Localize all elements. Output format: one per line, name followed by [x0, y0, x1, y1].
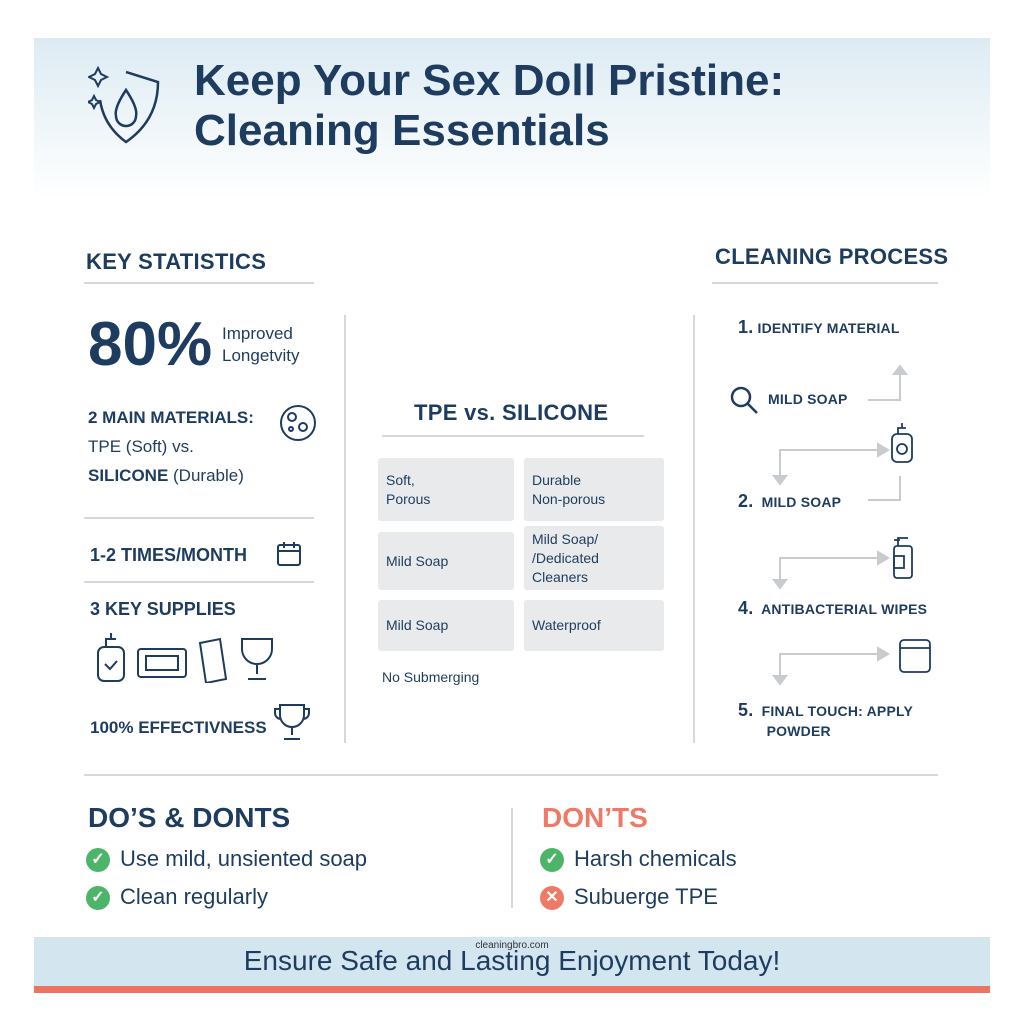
stat: materials: TPE (Soft) vs. [88, 437, 194, 456]
panel: cleaning process: 4. ANTIBACTERIAL WIPES [738, 598, 927, 618]
title: Keep Your Sex Doll Pristine: [194, 56, 784, 105]
stat: supplies: 3 KEY SUPPLIES [90, 599, 236, 619]
panel: donts: Harsh chemicals [574, 846, 737, 871]
stat: frequency: 1-2 TIMES/MONTH [90, 545, 247, 565]
panel: cleaning process: 5. FINAL TOUCH: APPLY [738, 700, 913, 720]
panel: donts [540, 802, 737, 910]
panel: key statistics: Longetvity [222, 346, 300, 365]
title [194, 56, 784, 155]
panel: donts: DON’TS [542, 802, 648, 833]
panel: cleaning process: POWDER [767, 723, 831, 739]
cells: Soft, [386, 472, 415, 488]
panel: TPE vs silicone: Mild Soap/ [532, 530, 598, 546]
panel: dos: Use mild, unsiented soap [120, 846, 367, 871]
panel: TPE vs silicone: Non-porous [532, 490, 605, 506]
panel: TPE vs silicone: Mild Soap [386, 617, 448, 633]
footer banner: cleaningbro.com [475, 940, 549, 951]
cells [378, 458, 514, 521]
stat: effectiveness: 100% EFFECTIVNESS [90, 718, 267, 737]
panel: donts: Subuerge TPE [574, 884, 718, 909]
footer banner: Ensure Safe and Lasting Enjoyment Today! [244, 945, 780, 976]
panel: dos: ✓ [91, 889, 105, 906]
panel: dos: ✓ [91, 851, 105, 868]
panel: key statistics: Improved [222, 324, 293, 343]
panel: TPE vs silicone: Mild Soap [386, 552, 448, 568]
panel: donts: ✕ [545, 889, 559, 906]
stat: materials: 2 MAIN MATERIALS: [88, 408, 254, 427]
panel: cleaning process: 2. MILD SOAP [738, 491, 841, 511]
panel: TPE vs silicone: /Dedicated [532, 550, 599, 566]
stat: materials: SILICONE (Durable) [88, 466, 244, 485]
panel: cleaning process: CLEANING PROCESS [715, 244, 948, 269]
cells: Porous [386, 490, 430, 506]
panel: dos: DO’S & DONTS [88, 802, 290, 833]
panel: key statistics: KEY STATISTICS [86, 249, 266, 274]
panel: cleaning process: 1. IDENTIFY MATERIAL [738, 317, 900, 337]
panel: dos: Clean regularly [120, 884, 268, 909]
panel: TPE vs silicone: Durable [532, 472, 581, 488]
panel: TPE vs silicone [378, 400, 664, 685]
arrows and icons [772, 364, 931, 686]
header band [34, 38, 990, 198]
title: Cleaning Essentials [194, 106, 610, 155]
stat: materials [88, 408, 254, 485]
stat: 80%: 80% [88, 310, 212, 379]
panel: dos [86, 802, 367, 910]
panel: TPE vs silicone: Cleaners [532, 568, 588, 584]
panel: TPE vs silicone: TPE vs. SILICONE [414, 400, 608, 425]
panel: TPE vs silicone: No Submerging [382, 669, 479, 685]
footer banner [34, 937, 990, 993]
panel: key statistics [84, 249, 316, 740]
panel: cleaning process [712, 244, 948, 739]
icon: shield with drop [88, 66, 160, 144]
panel: donts: ✓ [545, 851, 559, 868]
panel: TPE vs silicone: Waterproof [532, 617, 601, 633]
panel: cleaning process: MILD SOAP [768, 391, 848, 407]
